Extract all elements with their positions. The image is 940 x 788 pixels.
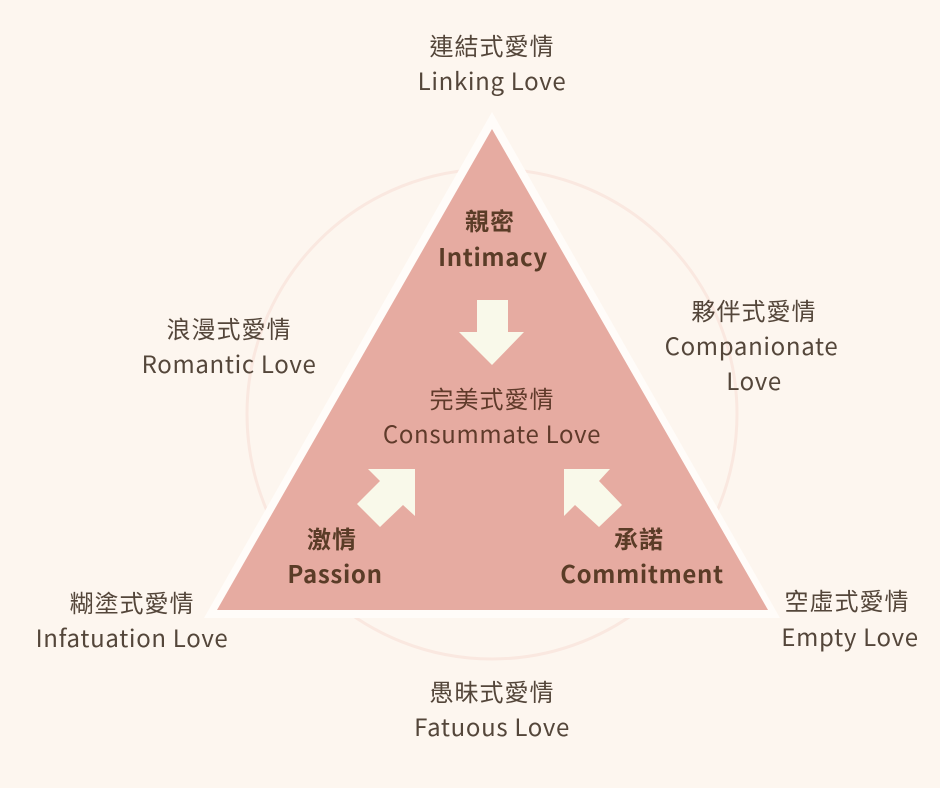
label: infatuation love: 糊塗式愛情 bbox=[70, 584, 194, 619]
label: commitment: 承諾 bbox=[614, 520, 664, 555]
triangle bbox=[204, 112, 780, 618]
label: empty love bbox=[781, 582, 919, 653]
label: companionate love bbox=[665, 292, 838, 397]
label: passion: Passion bbox=[287, 555, 383, 590]
label: commitment bbox=[560, 520, 724, 590]
label: romantic love bbox=[142, 310, 316, 380]
label: linking love: 連結式愛情 bbox=[430, 27, 554, 62]
label: linking love: Linking Love bbox=[418, 62, 566, 97]
label: consummate love: 完美式愛情 bbox=[430, 380, 554, 415]
label: consummate love: Consummate Love bbox=[383, 415, 601, 450]
label: linking love bbox=[418, 27, 566, 97]
label: intimacy: Intimacy bbox=[438, 238, 548, 273]
label: empty love: 空虛式愛情 bbox=[784, 582, 910, 617]
label: empty love: Empty Love bbox=[781, 618, 919, 653]
label: consummate love bbox=[383, 380, 601, 450]
label: fatuous love bbox=[414, 673, 570, 743]
label: infatuation love bbox=[36, 584, 228, 654]
label: romantic love: Romantic Love bbox=[142, 345, 316, 380]
arrow: up-right from passion bbox=[357, 469, 415, 527]
label: fatuous love: Fatuous Love bbox=[414, 708, 570, 743]
arrow: down from intimacy bbox=[459, 300, 524, 365]
background circle bbox=[247, 169, 737, 659]
label: intimacy: 親密 bbox=[465, 202, 515, 237]
label: fatuous love: 愚昧式愛情 bbox=[430, 673, 554, 708]
label: passion bbox=[287, 520, 383, 590]
label: intimacy bbox=[438, 202, 548, 273]
label: companionate love: 夥伴式愛情 bbox=[692, 292, 816, 327]
label: companionate love: Companionate bbox=[665, 327, 838, 362]
label: romantic love: 浪漫式愛情 bbox=[166, 310, 292, 345]
label: companionate love: Love bbox=[726, 362, 782, 397]
label: passion: 激情 bbox=[307, 520, 357, 555]
label: infatuation love: Infatuation Love bbox=[36, 619, 228, 654]
arrow: up-left from commitment bbox=[564, 469, 622, 527]
label: commitment: Commitment bbox=[560, 555, 724, 590]
